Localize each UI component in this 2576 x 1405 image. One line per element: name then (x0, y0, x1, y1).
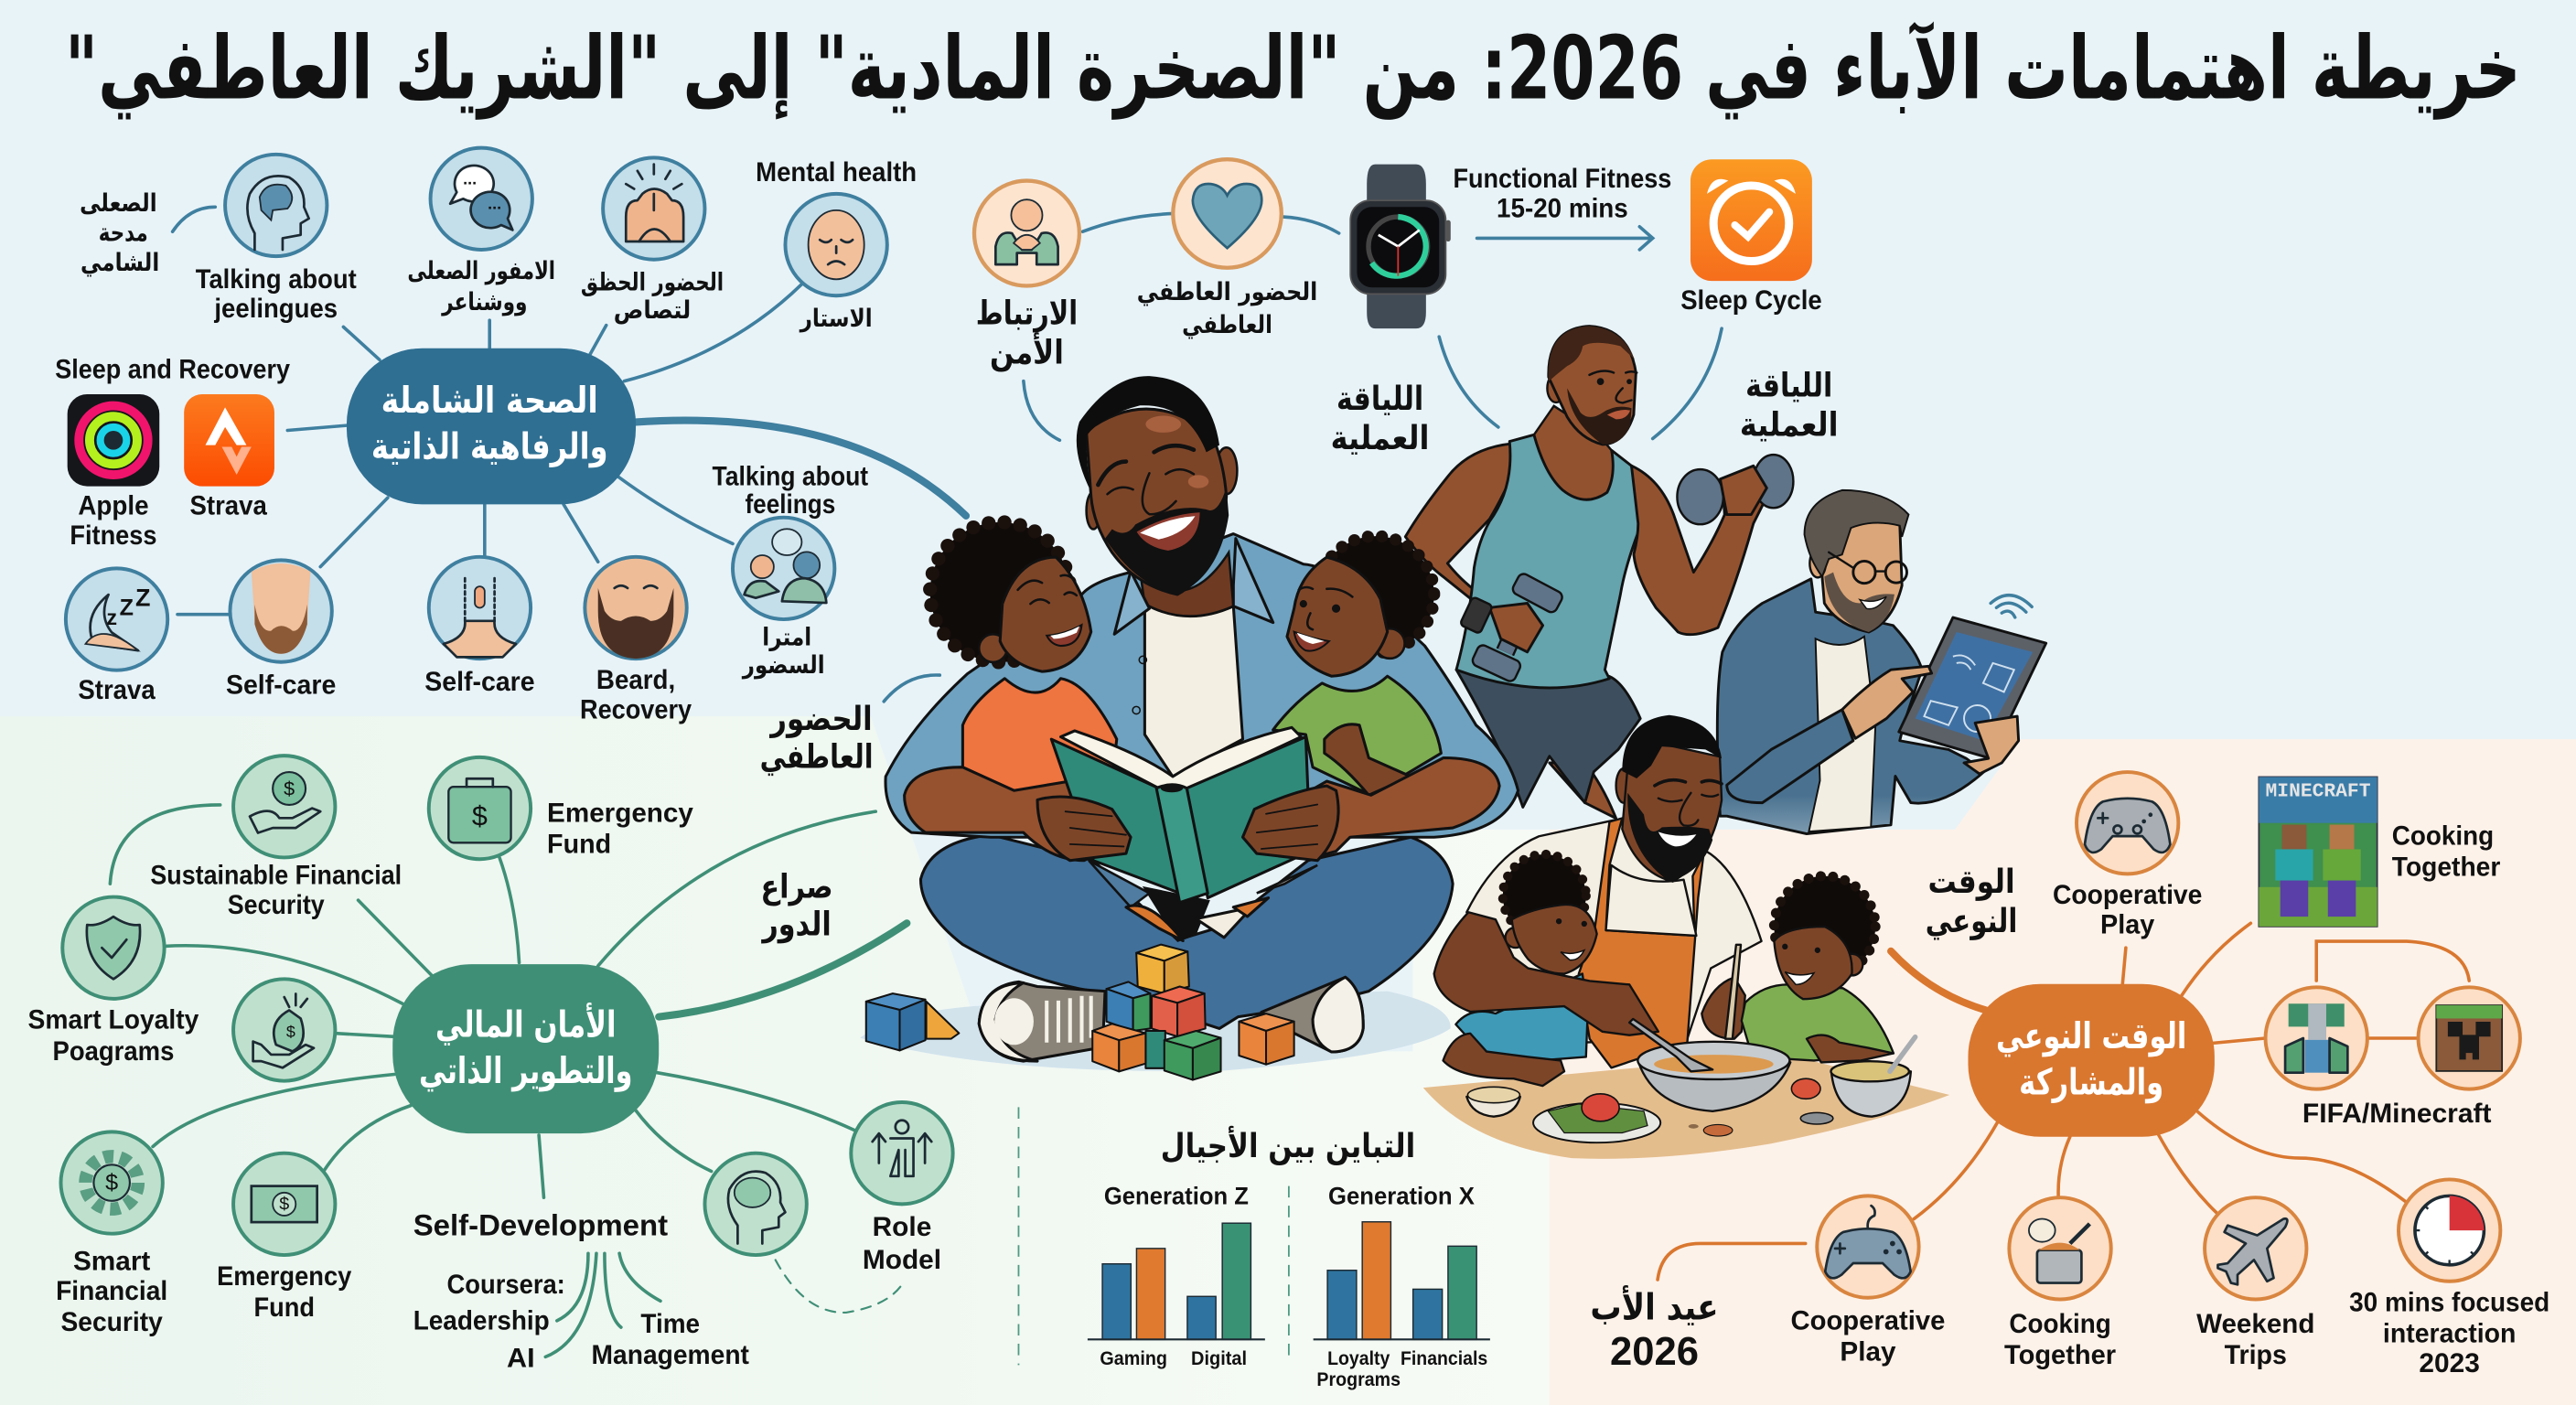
label: FIFA/Minecraft: FIFA/Minecraft (2302, 1099, 2492, 1129)
node: brain head (196, 155, 357, 324)
node: speech bubbles: الامفور الصعلى (407, 257, 555, 285)
label: quality time arabic: الوقت (1927, 863, 2015, 901)
node: sleep moon (66, 568, 167, 705)
label: functional fitness arabic left: اللياقة (1336, 381, 1423, 418)
node: cooking pot: Together (2004, 1340, 2117, 1370)
node: beard self-care: Self-care (226, 670, 336, 700)
node: smart financial gear: Smart (73, 1247, 150, 1277)
node: money bag hand (233, 979, 335, 1081)
node: clock (2349, 1179, 2549, 1378)
label: brain arabic (80, 189, 159, 277)
node: speech bubbles (407, 148, 555, 316)
node: smart financial gear (56, 1132, 167, 1337)
node: beard recovery: Beard, (596, 665, 675, 695)
label: cooking together: Cooking (2392, 821, 2494, 852)
shoes (979, 981, 1105, 1061)
node: sustainable financial: Sustainable Financial (150, 861, 402, 891)
node: emergency cash (217, 1153, 352, 1323)
label: functional fitness (1453, 164, 1671, 224)
self-development items: Time (640, 1309, 700, 1339)
node: neck self-care (424, 557, 535, 697)
node: brain head: Talking about (196, 264, 357, 295)
label: functional fitness arabic right: العملية (1740, 407, 1839, 445)
icon: apple fitness: Apple (78, 491, 149, 521)
chart: generation X: Loyalty (1327, 1346, 1390, 1369)
label: father's day 2026: عيد الأب (1590, 1285, 1719, 1329)
self-development items: Coursera: (447, 1270, 565, 1300)
node: controller bottom (1791, 1196, 1945, 1367)
node: creeper (2419, 987, 2520, 1089)
heading: التباين بين الأجيال (1161, 1125, 1415, 1165)
head (1616, 768, 1632, 803)
father arm (1434, 912, 1658, 1035)
panel: quality time (1590, 772, 2549, 1378)
connector to cooking scene (1891, 951, 1986, 1010)
forearms (905, 767, 1131, 861)
node: emergency fund (429, 757, 693, 860)
node: talking group: السضور (741, 651, 825, 680)
big bowl (1638, 1062, 1790, 1111)
node: talking group: feelings (745, 489, 835, 520)
self-development items (413, 1270, 749, 1374)
node: sad face: الاستار (799, 305, 873, 333)
label: emotional presence: الحضور (769, 701, 873, 738)
heading: sleep and recovery: Sleep and Recovery (55, 355, 290, 385)
node: beard recovery (580, 557, 692, 724)
heading: self-development: Self-Development (413, 1209, 668, 1242)
label: quality time arabic: النوعي (1926, 903, 2017, 940)
node: head in hands: لتصاص (614, 296, 691, 325)
node: sustainable financial (150, 756, 402, 920)
label: brain arabic: مدحة (99, 220, 148, 248)
node: sleep moon: z (106, 606, 117, 629)
hub: finance: الأمان المالي (435, 1003, 616, 1046)
node: FIFA (2266, 987, 2367, 1089)
chart: generation Z: Gaming (1100, 1346, 1167, 1369)
chart: generation Z: Digital (1191, 1346, 1247, 1369)
node: sustainable financial: Security (228, 890, 325, 920)
node: cooking pot: Cooking (2009, 1309, 2111, 1339)
minecraft cover (2259, 777, 2377, 927)
label: brain arabic: الشامي (80, 249, 159, 277)
node: smart loyalty: Poagrams (53, 1036, 174, 1067)
dumbbell raised (1677, 455, 1793, 524)
label: cooking together (2392, 821, 2501, 883)
node: talking group: امترا (762, 623, 811, 651)
icon: sleep cycle: Sleep Cycle (1680, 285, 1822, 316)
arrow (1477, 227, 1653, 250)
node: beard self-care (226, 560, 336, 700)
node: emotional presence heart: الحضور العاطفي (1137, 278, 1317, 306)
label: role conflict: صراع (761, 868, 833, 906)
chart: generation X: Programs (1316, 1367, 1401, 1390)
child feet (1089, 861, 1317, 942)
node: plane (2196, 1197, 2314, 1370)
illustration: cooking father and children (1423, 715, 1949, 1159)
node: clock: 30 mins focused (2349, 1288, 2549, 1318)
panel: financial security (28, 701, 953, 1374)
node: emergency fund: Emergency (547, 798, 693, 828)
child right (1701, 977, 1745, 1039)
node: speech bubbles: ... (463, 170, 477, 188)
connector to reading father (659, 923, 907, 1017)
label: role conflict: الدور (761, 906, 832, 944)
label: brain arabic: الصعلى (80, 189, 157, 218)
self-development items: Leadership (413, 1305, 550, 1335)
connector: emotional presence (884, 675, 939, 702)
node: sad face: Mental health (756, 157, 917, 188)
label: emotional presence (760, 701, 874, 776)
node: head in hands: الحضور الحظق (581, 268, 724, 296)
label: functional fitness arabic right: اللياقة (1745, 368, 1832, 405)
node: smart loyalty (28, 897, 199, 1067)
food on table (1791, 1078, 1820, 1099)
floor shadow (860, 992, 1451, 1071)
node: cooking pot (2004, 1197, 2117, 1370)
hands (1037, 797, 1131, 861)
label: quality time arabic (1926, 863, 2017, 940)
node: sustainable financial: $ (284, 778, 295, 800)
minecraft cover: MINECRAFT (2266, 781, 2371, 803)
icon: sleep cycle (1680, 159, 1822, 316)
node: plane: Weekend (2196, 1309, 2314, 1339)
label: father's day 2026: 2026 (1610, 1330, 1699, 1374)
node: talking group (713, 461, 868, 680)
node: talking group: Talking about (713, 461, 868, 491)
book (1061, 727, 1301, 790)
icon: apple fitness (68, 394, 159, 551)
node: emergency fund: Fund (547, 830, 611, 860)
label: functional fitness arabic left: العملية (1331, 420, 1429, 457)
node: sad face (756, 157, 917, 333)
node: plane: Trips (2225, 1340, 2287, 1370)
panel: holistic wellbeing (55, 148, 966, 724)
label: emotional presence: العاطفي (760, 738, 874, 776)
hub: wellbeing: الصحة الشاملة (381, 380, 598, 422)
node: speech bubbles: ووشناعر (441, 288, 528, 316)
hub: wellbeing (347, 349, 636, 504)
node: smart financial gear: Financial (56, 1276, 167, 1306)
node: smart financial gear: Security (60, 1307, 163, 1337)
panel: top centre nodes (974, 159, 1839, 457)
self-development items: AI (507, 1344, 535, 1374)
node: secure attachment: الارتباط (976, 295, 1078, 333)
label: functional fitness arabic left (1331, 381, 1429, 457)
hub: wellbeing: والرفاهية الذاتية (371, 425, 608, 467)
node: secure attachment (974, 181, 1079, 372)
icon: strava (184, 394, 274, 521)
self-development items: Management (592, 1340, 749, 1370)
node: emotional presence heart: العاطفي (1182, 311, 1272, 339)
hub: quality time: الوقت النوعي (1996, 1015, 2186, 1057)
node: controller top: Cooperative (2053, 880, 2202, 910)
illustration: fitness father and tech father (1405, 327, 2046, 834)
small bowl right (1831, 1071, 1911, 1117)
icon: strava: Strava (189, 491, 267, 521)
hub: finance (392, 964, 659, 1133)
hub: quality time (1968, 984, 2215, 1137)
chart: generation X: Generation X (1328, 1182, 1475, 1209)
node: role model (851, 1102, 953, 1275)
label: cooking together: Together (2392, 853, 2501, 883)
hub: quality time: والمشاركة (2019, 1061, 2163, 1103)
node: emergency cash: Emergency (217, 1261, 352, 1292)
label: functional fitness: 15-20 mins (1497, 194, 1628, 224)
node: smart loyalty: Smart Loyalty (28, 1005, 199, 1035)
jeans (920, 835, 1453, 1028)
panel: generational contrast (1018, 1107, 1490, 1390)
dumbbell lowered (1460, 572, 1564, 683)
node: money bag hand: $ (286, 1023, 295, 1041)
tech father (1717, 490, 2046, 834)
hub: finance: والتطوير الذاتي (419, 1050, 632, 1092)
node: emergency cash: Fund (254, 1292, 315, 1323)
node: sleep moon: Z (135, 585, 151, 612)
apron (1579, 818, 1703, 1067)
illustration: reading father and children (860, 376, 1519, 1080)
node: sleep moon: Z (120, 595, 134, 620)
father head (1216, 447, 1237, 494)
child right (1273, 676, 1441, 795)
connector to main illustration (634, 421, 966, 516)
icon: smart watch (1350, 165, 1451, 328)
chart: generation X: Financials (1401, 1346, 1487, 1369)
node: emergency cash: $ (279, 1194, 289, 1214)
node: role model: Role (873, 1212, 931, 1242)
node: clock: interaction (2383, 1319, 2516, 1349)
denim shirt (886, 534, 1519, 837)
label: father's day 2026 (1590, 1285, 1719, 1374)
node: controller bottom: Cooperative (1791, 1305, 1945, 1335)
table (1423, 1058, 1949, 1159)
child left (962, 679, 1117, 790)
node: role model: Model (863, 1245, 941, 1275)
fitness father (1405, 327, 1793, 819)
chart: generation X (1314, 1182, 1490, 1390)
node: emotional presence heart (1137, 159, 1317, 339)
node: smart financial gear: $ (105, 1170, 118, 1196)
chart: generation Z (1088, 1182, 1265, 1369)
node: controller top: Play (2100, 910, 2155, 940)
label: functional fitness arabic right (1740, 368, 1839, 445)
label: role conflict (761, 868, 833, 944)
child left (1455, 974, 1588, 1064)
icon: apple fitness: Fitness (70, 520, 157, 551)
node: secure attachment: الأمن (990, 332, 1064, 372)
label: functional fitness: Functional Fitness (1453, 164, 1671, 194)
node: brain growth (704, 1153, 807, 1255)
node: neck self-care: Self-care (424, 667, 535, 697)
node: clock: 2023 (2419, 1348, 2480, 1378)
chart: generation Z: Generation Z (1104, 1182, 1249, 1209)
node: speech bubbles: ... (488, 195, 501, 213)
node: sleep moon: Strava (78, 675, 156, 705)
building blocks (866, 945, 1294, 1080)
node: head in hands (581, 157, 724, 325)
node: brain head: jeelingues (213, 294, 338, 324)
node: controller bottom: Play (1840, 1336, 1896, 1367)
node: controller top (2053, 772, 2202, 940)
tablet (1899, 617, 2046, 758)
node: beard recovery: Recovery (580, 694, 692, 724)
node: emergency fund: $ (472, 801, 488, 832)
